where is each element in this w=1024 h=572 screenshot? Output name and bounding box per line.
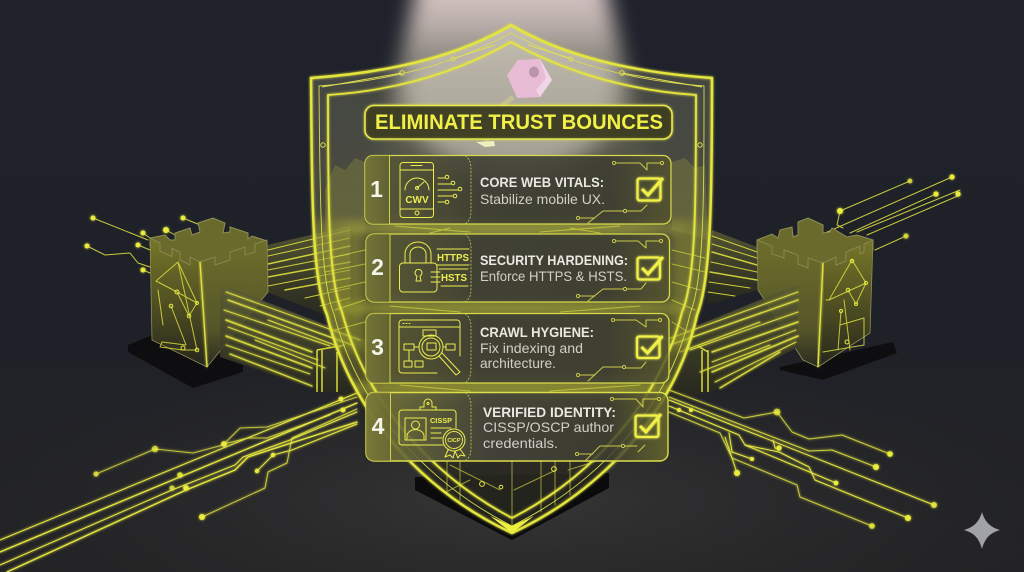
shield inner rim [328,42,696,518]
number 4: 4 [372,413,385,439]
shield node details [321,45,702,147]
shield tip highlight [490,516,534,533]
tower base [128,330,243,388]
tower circuit [823,260,866,352]
icon label: CWV [405,195,429,206]
icon: checkbox [637,336,662,358]
icon labels [437,253,469,284]
tower wires [87,218,200,273]
text block: Enforce HTTPS & HSTS. [480,268,627,284]
icon labels: CICP [447,438,461,444]
tower circuit dots [169,290,199,352]
text block [480,174,605,207]
icon: phone gauge [400,162,462,218]
number 3: 3 [371,334,384,360]
text block: CORE WEB VITALS: [480,174,604,190]
tower circuit dots [839,259,868,344]
icon labels: HTTPS [437,253,469,264]
wall post [317,345,345,392]
panel: card 3 crawl hygiene [366,314,669,383]
spotlight beam [365,0,660,190]
tower outer face [818,240,873,367]
castles seen through the glass [325,158,708,240]
circuit decoration [576,239,663,301]
text block [483,404,616,451]
text block: credentials. [483,435,558,451]
panel: shield [311,5,712,533]
number 2: 2 [371,254,384,280]
title: ELIMINATE TRUST BOUNCES [375,111,663,134]
text block: VERIFIED IDENTITY: [483,404,616,420]
right rear wall [707,230,757,305]
tower edge [200,262,207,367]
right front wall [660,285,798,400]
trace end dots [677,408,937,529]
tower back battlements [757,218,873,275]
icon: checkbox [638,178,663,200]
tower base [780,342,897,380]
circuit traces: lower right [669,390,937,529]
text block: CISSP/OSCP author [483,419,614,435]
panel: card 2 security hardening [366,234,670,302]
circuit decoration [575,397,661,460]
icon labels: CISSP [430,416,452,425]
wall post [698,346,708,392]
icon: pink key [476,59,552,147]
tower wire dots [837,174,961,239]
text block: Fix indexing and [480,340,583,356]
icon: id badge [399,399,465,458]
tower wires [825,177,960,250]
shield glass fill [311,25,712,533]
base slab: centre [415,473,609,540]
icon: padlock [400,242,469,292]
icon: site map magnifier [399,320,460,375]
left tower [84,216,268,388]
icon: checkbox [636,414,661,437]
panel: card 1 core web vitals [365,156,671,224]
icon: checkbox [638,257,663,280]
text block: architecture. [480,355,556,371]
tower edge [818,263,823,367]
right tower [757,174,961,380]
tower outer face [150,238,207,367]
structure seen through the glass [325,226,705,528]
left front wall [220,288,365,400]
tower inner face [757,240,823,367]
tower back battlements [150,218,267,272]
text block: CRAWL HYGIENE: [480,324,594,340]
shield middle line [319,33,704,526]
left rear wall [267,226,350,325]
text block [480,324,594,371]
tower circuit [156,262,197,350]
text block [480,252,628,284]
icon: sparkle watermark [964,512,1000,549]
text block: Stabilize mobile UX. [480,191,605,207]
shield outer rim [311,25,712,533]
tower wire dots [84,216,186,272]
trace end dots [93,397,345,520]
title [365,106,672,139]
icon labels: HSTS [441,273,467,284]
tower inner face [200,240,268,367]
circuit decoration [576,318,662,381]
number 1: 1 [370,176,383,202]
circuit traces: lower left [0,393,357,572]
circuit decoration [576,161,664,223]
text block: SECURITY HARDENING: [480,252,628,268]
icon labels [430,416,461,444]
panel: card 4 verified identity [366,392,668,461]
inner glow [312,5,712,528]
